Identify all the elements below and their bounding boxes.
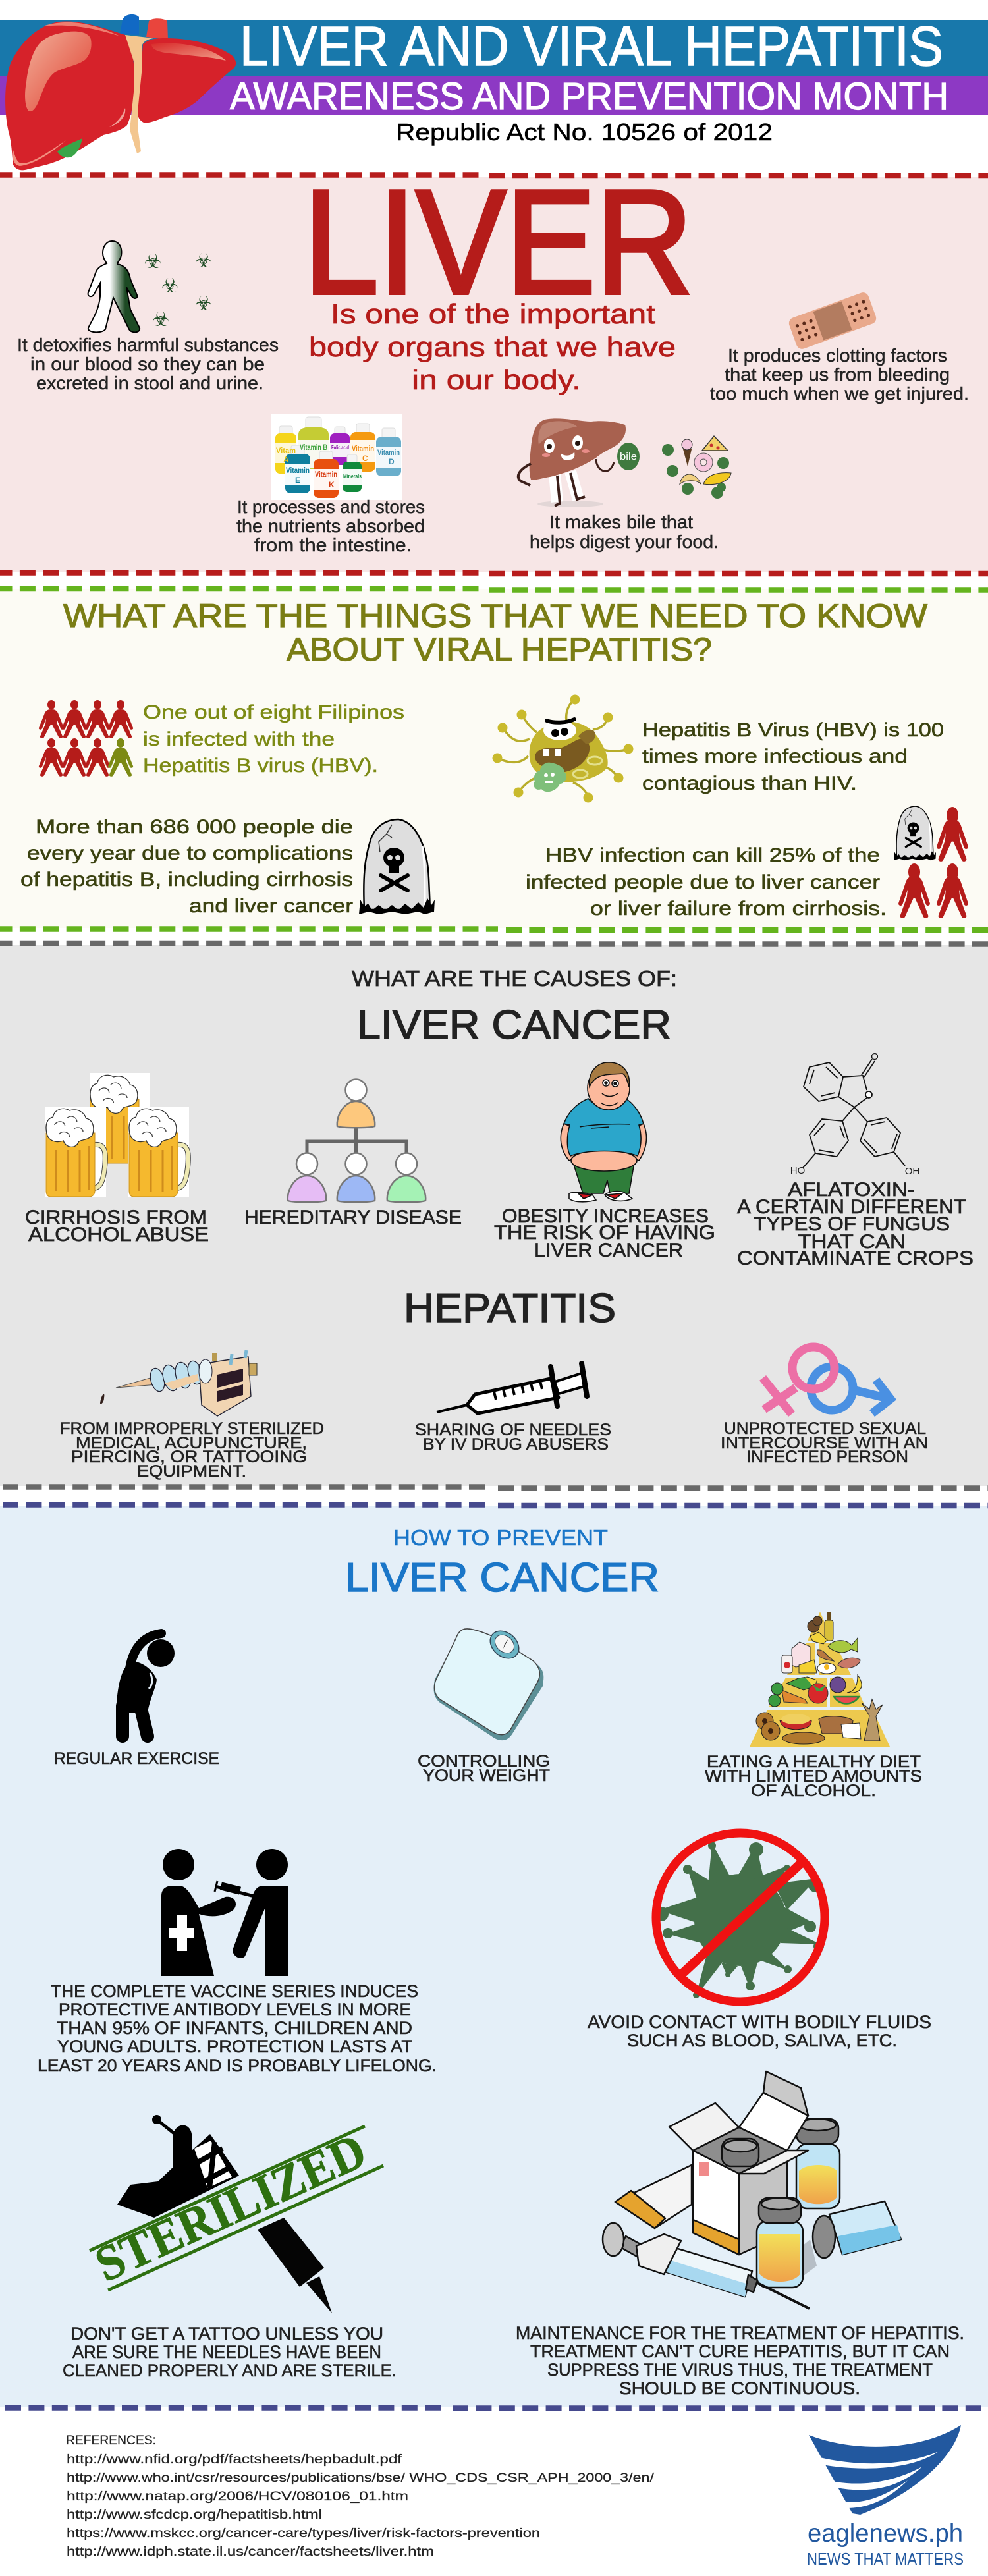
icon: medicine box, vials and syringe	[603, 2071, 901, 2309]
icon: vitamin bottles: Vitamin	[315, 470, 337, 479]
heading	[63, 597, 928, 668]
text: obesity: OBESITY INCREASES	[502, 1205, 709, 1227]
icon: vitamin bottles: E	[295, 476, 300, 485]
icon: aflatoxin molecule: OH	[905, 1166, 919, 1177]
text: detox: in our blood so they can be	[30, 354, 265, 374]
text: obesity: THE RISK OF HAVING	[494, 1222, 715, 1244]
icon: vitamin bottles: C	[362, 454, 368, 463]
text: obesity: LIVER CANCER	[534, 1240, 683, 1261]
icon: vitamin bottles: Vitamin	[286, 466, 310, 475]
heading: WHAT ARE THE THINGS THAT WE NEED TO KNOW	[63, 597, 928, 634]
icon: syringe	[437, 1363, 587, 1413]
references: http://www.natap.org/2006/HCV/080106_01.htm	[67, 2490, 408, 2504]
text: sharing needles: BY IV DRUG ABUSERS	[423, 1435, 609, 1454]
icon: detox person with biohazards: ☣	[144, 250, 161, 273]
text: HBV more infectious	[642, 719, 944, 794]
icon: vitamin bottles: D	[389, 457, 395, 466]
text: sharing needles: SHARING OF NEEDLES	[415, 1421, 611, 1439]
panel: causes	[25, 966, 974, 1481]
text: unprotected intercourse: INFECTED PERSON	[746, 1448, 908, 1466]
text: deaths per year	[20, 816, 353, 917]
text: nutrients: It processes and stores	[237, 497, 425, 517]
icon: cartoon liver with bile	[518, 418, 731, 507]
text: vaccine: PROTECTIVE ANTIBODY LEVELS IN MORE	[59, 2000, 411, 2019]
references: http://www.sfcdcp.org/hepatitisb.html	[67, 2508, 322, 2522]
icon: tombstone	[359, 819, 435, 914]
icon: detox person with biohazards: ☣	[161, 275, 178, 298]
subtitle: AWARENESS AND PREVENTION MONTH	[230, 75, 948, 118]
text: one out of eight: Hepatitis B virus (HBV).	[143, 755, 378, 777]
icon: no bodily fluids sign	[654, 1833, 825, 2002]
text: unprotected intercourse: INTERCOURSE WITH AN	[721, 1434, 928, 1452]
icon: bandage	[787, 291, 878, 350]
icon: vaccination	[161, 1849, 288, 1976]
icon: family tree	[288, 1079, 425, 1202]
text: clotting	[710, 345, 969, 404]
icon: overweight man	[561, 1062, 646, 1202]
text: treatment: TREATMENT CAN’T CURE HEPATITIS, BUT IT CAN	[530, 2342, 950, 2361]
republic act line: Republic Act No. 10526 of 2012	[396, 119, 773, 146]
text: aflatoxin: AFLATOXIN-	[788, 1179, 915, 1201]
icon: sterilized tattoo machine: STERILIZED	[87, 2123, 374, 2292]
text: unprotected intercourse	[721, 1419, 928, 1466]
text: HBV more infectious: contagious than HIV.	[642, 773, 857, 794]
text: detox	[17, 335, 279, 393]
text: bodily fluids: AVOID CONTACT WITH BODILY FLUIDS	[588, 2012, 931, 2032]
text: controlling weight	[418, 1752, 550, 1785]
text: treatment: SUPPRESS THE VIRUS THUS, THE TREATMENT	[547, 2360, 933, 2380]
icon: eagle wing	[809, 2425, 961, 2515]
text: hereditary: HEREDITARY DISEASE	[244, 1207, 462, 1228]
text: regular exercise: REGULAR EXERCISE	[54, 1749, 219, 1768]
text: aflatoxin: TYPES OF FUNGUS	[754, 1213, 950, 1235]
intro statement: in our body.	[412, 364, 581, 395]
text: detox: excreted in stool and urine.	[36, 373, 263, 393]
text: aflatoxin	[737, 1179, 974, 1269]
icon: tattoo machine	[100, 1350, 257, 1416]
text: tattoo warning	[63, 2324, 397, 2380]
intro statement: body organs that we have	[309, 331, 676, 362]
panel: what the liver does	[17, 159, 969, 555]
text: cirrhosis	[25, 1207, 209, 1246]
text: aflatoxin: CONTAMINATE CROPS	[737, 1247, 974, 1269]
text: improperly sterilized: PIERCING, OR TATTOOING	[71, 1448, 307, 1466]
icon: detox person with biohazards: ☣	[152, 308, 169, 331]
icon: cartoon liver with bile: bile	[620, 451, 637, 462]
text: healthy diet	[705, 1753, 922, 1800]
text: deaths per year: and liver cancer	[189, 895, 353, 917]
icon: vitamin bottles: A	[283, 455, 289, 464]
text: aflatoxin: A CERTAIN DIFFERENT	[737, 1196, 966, 1218]
text: vaccine: YOUNG ADULTS. PROTECTION LASTS AT	[57, 2037, 412, 2056]
text: tattoo warning: CLEANED PROPERLY AND ARE STERILE.	[63, 2361, 397, 2380]
text: bile: helps digest your food.	[530, 532, 719, 552]
text: nutrients: the nutrients absorbed	[236, 516, 425, 536]
text: HBV more infectious: Hepatitis B Virus (HBV) is 100	[642, 719, 944, 741]
text: sharing needles	[415, 1421, 611, 1454]
logo: eagle news	[807, 2425, 964, 2569]
text: HBV can kill 25%: HBV infection can kill 25% of the	[545, 844, 880, 866]
heading: ABOUT VIRAL HEPATITIS?	[287, 631, 712, 668]
text: treatment	[516, 2323, 964, 2398]
text: vaccine	[38, 1981, 437, 2075]
panel: prevention	[38, 1525, 964, 2398]
text: improperly sterilized	[60, 1419, 324, 1481]
icon: detox person with biohazards: ☣	[195, 250, 212, 273]
text: cirrhosis: CIRRHOSIS FROM	[25, 1207, 207, 1228]
icon: liver illustration	[5, 14, 236, 170]
text: treatment: MAINTENANCE FOR THE TREATMENT OF HEPATITIS.	[516, 2323, 964, 2343]
text: clotting: It produces clotting factors	[728, 345, 947, 366]
header banner	[0, 15, 988, 115]
text: cirrhosis: ALCOHOL ABUSE	[28, 1224, 209, 1246]
text: one out of eight	[143, 701, 404, 777]
heading: liver cancer: LIVER CANCER	[345, 1555, 659, 1601]
text: aflatoxin: THAT CAN	[798, 1231, 906, 1253]
tagline: NEWS THAT MATTERS	[807, 2549, 964, 2569]
icon: aflatoxin molecule: O	[871, 1051, 879, 1062]
heading: how to prevent: HOW TO PREVENT	[393, 1525, 608, 1550]
icon: vitamin bottles: Vitam	[276, 446, 296, 455]
text: tattoo warning: ARE SURE THE NEEDLES HAVE BEEN	[72, 2342, 381, 2362]
text: deaths per year: every year due to complications	[27, 842, 353, 864]
icon: vitamin bottles	[271, 414, 402, 500]
references: http://www.nfid.org/pdf/factsheets/hepbadult.pdf	[67, 2453, 402, 2467]
text: HBV more infectious: times more infectious and	[642, 746, 908, 767]
heading: causes: WHAT ARE THE CAUSES OF:	[352, 966, 677, 991]
text: HBV can kill 25%	[526, 844, 887, 919]
text: controlling weight: CONTROLLING	[418, 1752, 550, 1770]
text: bile: It makes bile that	[549, 512, 693, 532]
title: LIVER AND VIRAL HEPATITIS	[240, 15, 943, 77]
text: vaccine: THE COMPLETE VACCINE SERIES INDUCES	[51, 1981, 418, 2001]
heading: LIVER: LIVER	[304, 159, 693, 325]
text: clotting: too much when we get injured.	[710, 383, 969, 404]
text: unprotected intercourse: UNPROTECTED SEXUAL	[724, 1419, 926, 1438]
text: vaccine: THAN 95% OF INFANTS, CHILDREN AND	[57, 2018, 412, 2038]
icon: vitamin bottles: Folic acid	[331, 445, 349, 451]
references	[66, 2434, 655, 2559]
text: HBV can kill 25%: infected people due to liver cancer	[526, 871, 880, 893]
text: bile	[530, 512, 719, 552]
text: healthy diet: EATING A HEALTHY DIET	[707, 1753, 921, 1771]
icon: beer mugs	[45, 1073, 189, 1197]
heading: liver cancer: LIVER CANCER	[357, 1002, 671, 1048]
icon: gender symbols	[763, 1347, 891, 1414]
icon: vitamin bottles: K	[329, 480, 335, 489]
icon: exercise	[116, 1633, 175, 1736]
heading: hepatitis: HEPATITIS	[404, 1286, 616, 1331]
text: HBV can kill 25%: or liver failure from cirrhosis.	[590, 898, 887, 919]
references: http://www.who.int/csr/resources/publications/bse/ WHO_CDS_CSR_APH_2000_3/en/	[67, 2471, 655, 2485]
intro statement	[309, 298, 676, 395]
text: one out of eight: One out of eight Filipinos	[143, 701, 404, 723]
text: nutrients: from the intestine.	[254, 535, 412, 555]
text: deaths per year: More than 686 000 people die	[36, 816, 353, 838]
text: nutrients	[236, 497, 425, 555]
panel: viral hepatitis facts	[20, 597, 968, 919]
icon: food pyramid	[750, 1612, 890, 1747]
text: improperly sterilized: EQUIPMENT.	[137, 1462, 246, 1481]
icon: detox person with biohazards: ☣	[195, 292, 212, 315]
text: bodily fluids	[588, 2012, 931, 2050]
intro statement: Is one of the important	[331, 298, 655, 329]
text: obesity	[494, 1205, 715, 1261]
text: healthy diet: OF ALCOHOL.	[751, 1782, 876, 1800]
wordmark: eaglenews.ph	[808, 2519, 963, 2548]
text: detox: It detoxifies harmful substances	[17, 335, 279, 355]
icon: aflatoxin molecule	[790, 1051, 919, 1177]
references: https://www.mskcc.org/cancer-care/types/liver/risk-factors-prevention	[67, 2527, 540, 2540]
text: controlling weight: YOUR WEIGHT	[423, 1767, 550, 1785]
icon: weighing scale	[433, 1626, 543, 1740]
text: improperly sterilized: FROM IMPROPERLY STERILIZED	[60, 1419, 324, 1438]
text: improperly sterilized: MEDICAL, ACUPUNCTURE,	[76, 1434, 307, 1452]
text: treatment: SHOULD BE CONTINUOUS.	[619, 2378, 860, 2398]
text: one out of eight: is infected with the	[143, 728, 335, 750]
icon: detox person with biohazards	[88, 241, 212, 332]
icon: vitamin bottles: Vitamin B	[300, 443, 327, 452]
text: tattoo warning: DON'T GET A TATTOO UNLESS YOU	[70, 2324, 383, 2343]
icon: one in eight people	[39, 700, 133, 777]
text: vaccine: LEAST 20 YEARS AND IS PROBABLY LIFELONG.	[38, 2056, 437, 2075]
icon: vitamin bottles: Vitamin	[352, 444, 374, 453]
icon: small tombstone and three people	[894, 806, 968, 918]
text: clotting: that keep us from bleeding	[725, 364, 950, 385]
icon: vitamin bottles: Minerals	[343, 473, 362, 480]
icon: virus character	[493, 694, 634, 802]
text: bodily fluids: SUCH AS BLOOD, SALIVA, ETC.	[627, 2031, 897, 2050]
text: deaths per year: of hepatitis B, including cirrhosis	[20, 869, 353, 891]
references: REFERENCES:	[66, 2434, 156, 2448]
text: healthy diet: WITH LIMITED AMOUNTS	[705, 1767, 922, 1786]
references: http://www.idph.state.il.us/cancer/factsheets/liver.htm	[67, 2545, 434, 2559]
icon: vitamin bottles: Vitamin	[377, 448, 400, 457]
icon: aflatoxin molecule: HO	[790, 1165, 805, 1176]
